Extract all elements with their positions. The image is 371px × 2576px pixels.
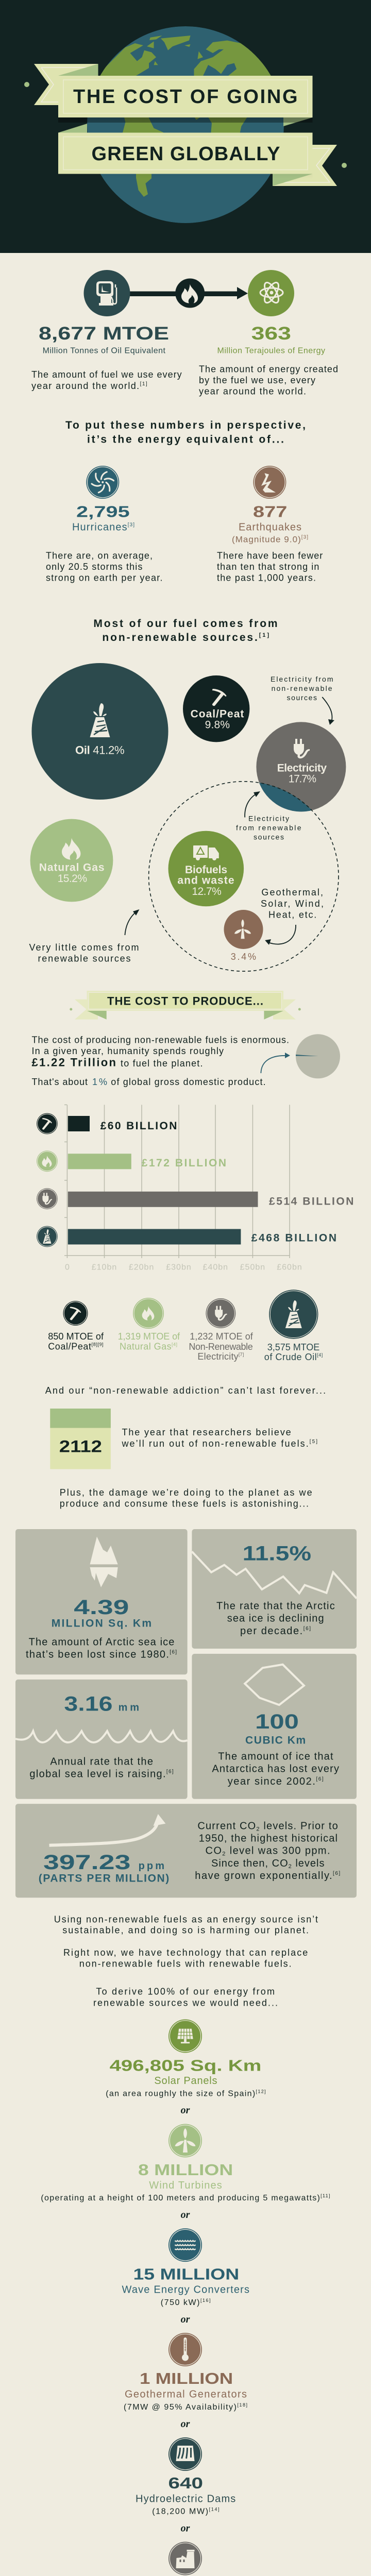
bubble: natural gas: 15.2% xyxy=(58,873,87,885)
crude oil xyxy=(264,1290,323,1362)
stat: earthquakes: (Magnitude 9.0) xyxy=(232,534,301,544)
stat: 363 million terajoules: 363 xyxy=(251,324,291,344)
bubble: oil xyxy=(32,663,168,800)
option: wave energy converters: 15 MILLION xyxy=(133,2265,239,2283)
text: year researchers believe: we’ll run out of non-renewable fuels. xyxy=(122,1438,309,1449)
heading: perspective xyxy=(65,419,306,445)
stat: earthquakes: 877 xyxy=(253,503,287,521)
header: dark background with globe and title xyxy=(0,0,371,253)
natural gas: [4] xyxy=(172,1342,177,1347)
non-renewable electricity xyxy=(189,1298,254,1362)
option: solar panels: [12] xyxy=(256,2089,266,2094)
panel: arctic sea ice lost: 4.39 xyxy=(74,1596,129,1619)
stat: earthquakes: the past 1,000 years. xyxy=(217,573,316,583)
bubble: biofuels and waste xyxy=(168,831,244,906)
panel: arctic sea ice lost: The amount of Arctic sea ice xyxy=(29,1637,174,1648)
label: electricity from renewable sources: Electricity xyxy=(248,814,289,822)
panel: sea level: 3.16 xyxy=(64,1693,112,1716)
icon: waves xyxy=(15,1731,188,1742)
text block: cost of producing fuels: The cost of producing non-renewable fuels is enormous. xyxy=(32,1035,289,1045)
panel: arctic decline rate: per decade. xyxy=(240,1625,302,1637)
heading: fuel sources: [1] xyxy=(259,632,269,638)
ribbon tail right xyxy=(273,145,337,186)
option: wave energy converters: (750 kW) xyxy=(161,2298,199,2307)
title banner line 2 xyxy=(58,133,312,174)
bar: oil: £468 BILLION xyxy=(251,1232,336,1244)
bar: oil xyxy=(68,1229,336,1245)
ribbon tail left xyxy=(34,64,98,105)
stat: earthquakes xyxy=(217,466,323,583)
bar: natural gas xyxy=(68,1154,226,1169)
option: wave energy converters: [16] xyxy=(200,2298,211,2303)
option: geothermal generators: 1 MILLION xyxy=(140,2369,233,2387)
stat: hurricanes: only 20.5 storms this xyxy=(46,562,142,572)
axis labels: £50bn xyxy=(240,1263,265,1272)
stat: 8,677 MTOE: The amount of fuel we use every xyxy=(31,369,182,380)
bubble: biofuels and waste: Biofuels xyxy=(185,864,227,876)
stat: 363 million terajoules: The amount of energy created xyxy=(199,364,338,374)
icon: fuel pump xyxy=(83,270,130,316)
arrow: rising curve xyxy=(49,1814,165,1845)
option: geothermal generators: [18] xyxy=(237,2402,247,2408)
stat: earthquakes: There have been fewer xyxy=(217,550,323,561)
label: very little comes from renewable sources xyxy=(29,942,139,964)
panel: CO2 levels: Current CO xyxy=(197,1820,256,1832)
bar: natural gas: £172 BILLION xyxy=(142,1157,226,1169)
stat: 8,677 MTOE xyxy=(31,324,182,391)
bubble: coal/peat: 9.8% xyxy=(205,719,230,731)
bar: electricity: £514 BILLION xyxy=(269,1195,353,1208)
bubble: electricity: 17.7% xyxy=(289,773,316,785)
stat: 8,677 MTOE: year around the world. xyxy=(31,381,139,391)
text: to derive 100%: To derive 100% of our energy from xyxy=(96,1987,275,1997)
crude oil: 3,575 MTOE xyxy=(267,1342,319,1352)
option: wave energy converters xyxy=(122,2228,249,2307)
option: geothermal generators: (7MW @ 95% Availability) xyxy=(124,2403,237,2412)
icon: flame xyxy=(175,278,205,308)
option: solar panels: 496,805 Sq. Km xyxy=(110,2056,261,2074)
panel: arctic sea ice lost: [6] xyxy=(170,1649,177,1655)
bubble: natural gas xyxy=(30,819,113,902)
bar: electricity xyxy=(68,1192,353,1208)
text block: cost of producing fuels: £1.22 Trillion xyxy=(32,1056,116,1069)
stat: 363 million terajoules: year around the world. xyxy=(199,386,306,397)
globe illustration xyxy=(87,26,289,223)
option: hydroelectric dams: Hydroelectric Dams xyxy=(136,2493,235,2504)
crude oil: [4] xyxy=(317,1352,323,1358)
panel: CO2 levels: CO xyxy=(205,1845,222,1857)
text: year researchers believe: The year that researchers believe xyxy=(122,1427,291,1437)
ribbon connector folds xyxy=(58,117,312,133)
heading: fuel sources: non-renewable sources. xyxy=(102,632,258,643)
bar: coal: £60 BILLION xyxy=(100,1120,177,1132)
panel: sea level: [6] xyxy=(166,1769,174,1775)
option: geothermal generators: Geothermal Generators xyxy=(125,2388,247,2400)
text block: cost of producing fuels xyxy=(32,1035,289,1087)
panel: antarctic ice loss: 100 xyxy=(255,1710,299,1733)
coal/peat: [8][9] xyxy=(92,1342,104,1347)
label: electricity from non-renewable sources xyxy=(271,675,333,702)
text: technology available: non-renewable fuels with renewable fuels. xyxy=(79,1958,292,1969)
option: hydroelectric dams: (18,200 MW) xyxy=(152,2507,208,2516)
panel: CO2 levels: 1950, the highest historical xyxy=(199,1833,338,1844)
label: electricity from non-renewable sources: sources xyxy=(286,693,317,702)
option: wave energy converters: Wave Energy Converters xyxy=(122,2284,249,2296)
panel: antarctic ice loss xyxy=(192,1654,357,1799)
panel: antarctic ice loss: [6] xyxy=(316,1776,324,1782)
title banner line 1 xyxy=(58,76,312,117)
label: electricity from renewable sources: sources xyxy=(254,833,284,841)
natural gas: Natural Gas xyxy=(120,1341,172,1351)
stat: hurricanes: [3] xyxy=(128,522,134,528)
arrow: to renewable circle xyxy=(125,909,139,935)
non-renewable electricity: Electricity xyxy=(197,1351,239,1362)
word: or: or xyxy=(181,2105,190,2116)
stat: 8,677 MTOE: [1] xyxy=(140,381,147,387)
text: damage to the planet xyxy=(60,1487,312,1509)
axis labels: £40bn xyxy=(203,1263,228,1272)
panel: sea level xyxy=(15,1680,188,1799)
banner shadows xyxy=(58,117,312,179)
title banner line 1: THE COST OF GOING xyxy=(73,86,298,108)
text: not sustainable: Using non-renewable fuels as an energy source isn’t xyxy=(54,1914,318,1924)
stat: hurricanes: strong on earth per year. xyxy=(46,573,163,583)
bubble: geothermal, solar, wind, heat: 3.4% xyxy=(231,952,256,962)
decorative dots xyxy=(24,82,29,87)
coal/peat: 850 MTOE of xyxy=(48,1331,104,1342)
axis labels: 0 xyxy=(65,1263,70,1272)
text: damage to the planet: Plus, the damage we’re doing to the planet as we xyxy=(60,1487,312,1498)
panel: CO2 levels: level was 300 ppm. xyxy=(226,1845,330,1857)
panel: antarctic ice loss: year since 2002. xyxy=(228,1776,315,1787)
text block: cost of producing fuels: to fuel the planet. xyxy=(121,1058,203,1069)
panel: CO2 levels: 2 xyxy=(222,1851,225,1857)
axis labels xyxy=(65,1263,302,1272)
icon: iceberg xyxy=(90,1536,118,1587)
option: wind turbines: [11] xyxy=(321,2193,330,2198)
section banner: the cost to produce: THE COST TO PRODUCE... xyxy=(107,994,263,1007)
word: or: or xyxy=(181,2314,190,2325)
option: wind turbines: (operating at a height of 100 meters and producing 5 megawatts) xyxy=(41,2194,320,2202)
non-renewable electricity: Non-Renewable xyxy=(189,1342,253,1352)
calendar: 2112: 2112 xyxy=(59,1437,102,1455)
bar: coal xyxy=(68,1116,177,1132)
axis labels: £30bn xyxy=(166,1263,192,1272)
panel: CO2 levels: Since then, CO xyxy=(211,1858,288,1869)
stat: 363 million terajoules: Million Terajoules of Energy xyxy=(217,347,325,355)
heading: fuel sources xyxy=(93,618,278,643)
panel: CO2 levels: levels. Prior to xyxy=(260,1820,338,1832)
stat: hurricanes: There are, on average, xyxy=(46,550,153,561)
stat: 8,677 MTOE: 8,677 MTOE xyxy=(39,324,169,344)
icon: coal xyxy=(37,1113,58,1134)
word: or: or xyxy=(181,2523,190,2534)
icon: oil xyxy=(37,1226,58,1247)
panel: CO2 levels: [6] xyxy=(333,1871,340,1876)
panel: arctic sea ice lost: MILLION Sq. Km xyxy=(52,1617,151,1629)
heading: perspective: it’s the energy equivalent of... xyxy=(87,434,284,445)
stat: earthquakes: Earthquakes xyxy=(239,521,301,533)
text block: cost of producing fuels: of global gross domestic product. xyxy=(111,1077,266,1087)
stat: 8,677 MTOE: Million Tonnes of Oil Equivalent xyxy=(43,347,166,355)
icon: electricity xyxy=(37,1188,58,1209)
option: hydroelectric dams xyxy=(136,2437,235,2516)
panel: CO2 levels: 2 xyxy=(289,1863,292,1870)
bubble: coal/peat: Coal/Peat xyxy=(191,708,244,720)
icon: earthquake xyxy=(253,466,286,499)
panel: CO2 levels: levels xyxy=(292,1858,325,1869)
natural gas: 1,319 MTOE of xyxy=(118,1331,180,1342)
option: solar panels: (an area roughly the size of Spain) xyxy=(106,2089,255,2098)
panel: CO2 levels: ppm xyxy=(139,1860,164,1872)
word: or: or xyxy=(181,2209,190,2221)
option: solar panels: Solar Panels xyxy=(154,2075,217,2087)
bar chart: cost to produce xyxy=(37,1105,353,1272)
panel: CO2 levels: 397.23 xyxy=(43,1851,130,1874)
stat: 363 million terajoules xyxy=(199,324,338,397)
arrow: to electricity xyxy=(322,697,334,725)
panel: arctic decline rate: The rate that the Arctic xyxy=(216,1601,335,1612)
panel: sea level: mm xyxy=(119,1702,139,1714)
stat: hurricanes xyxy=(46,466,163,583)
label: electricity from non-renewable sources: Electricity from xyxy=(271,675,333,683)
pie chart: 1% of GDP xyxy=(261,1034,340,1078)
text: non-renewable addiction: And our “non-renewable addiction” can’t last forever... xyxy=(45,1385,326,1396)
bubble chart: fuel sources xyxy=(29,663,346,971)
axis labels: £10bn xyxy=(92,1263,117,1272)
panel: CO2 levels: (PARTS PER MILLION) xyxy=(39,1872,169,1884)
label: very little comes from renewable sources: Very little comes from xyxy=(29,942,139,953)
text: year researchers believe xyxy=(122,1427,317,1449)
title banner line 2: GREEN GLOBALLY xyxy=(92,143,280,165)
coal/peat: Coal/Peat xyxy=(48,1341,91,1351)
stat: hurricanes: 2,795 xyxy=(76,503,130,521)
option: wind turbines xyxy=(41,2124,330,2202)
arrow: to geothermal bubble xyxy=(265,925,296,945)
section banner: the cost to produce xyxy=(70,991,301,1020)
text block: cost of producing fuels: 1% xyxy=(92,1077,107,1087)
stat: 363 million terajoules: by the fuel we use, every xyxy=(199,375,315,385)
connector arrow xyxy=(129,287,248,299)
arrow: to renewable electricity xyxy=(245,791,260,817)
icon row: consumption by fuel xyxy=(48,1290,323,1362)
heading: fuel sources: Most of our fuel comes from xyxy=(93,618,278,630)
text block: cost of producing fuels: That's about xyxy=(32,1077,88,1087)
axis labels: £20bn xyxy=(129,1263,154,1272)
crude oil: of Crude Oil xyxy=(264,1352,317,1362)
calendar: 2112 xyxy=(50,1409,111,1469)
bubble: oil: Oil 41.2% xyxy=(75,744,125,757)
line chart: zigzag decline xyxy=(192,1552,357,1599)
panel: arctic sea ice lost: that’s been lost since 1980. xyxy=(26,1649,169,1660)
label: electricity from non-renewable sources: non-renewable xyxy=(272,684,332,692)
panel: arctic sea ice lost xyxy=(15,1529,188,1674)
label: very little comes from renewable sources: renewable sources xyxy=(38,954,131,964)
text block: cost of producing fuels: In a given year, humanity spends roughly xyxy=(32,1046,224,1056)
text: technology available: Right now, we have technology that can replace xyxy=(63,1947,308,1958)
text: to derive 100% xyxy=(93,1987,278,2008)
bubble: natural gas: Natural Gas xyxy=(39,862,104,874)
panel: antarctic ice loss: Antarctica has lost every xyxy=(212,1764,339,1775)
panel: arctic decline rate: 11.5% xyxy=(243,1543,311,1565)
text: to derive 100%: renewable sources we would need... xyxy=(93,1998,278,2008)
natural gas xyxy=(118,1298,180,1351)
panel: arctic decline rate xyxy=(192,1529,357,1649)
stat: earthquakes: [3] xyxy=(301,534,308,540)
option: wind turbines: 8 MILLION xyxy=(138,2161,233,2179)
label: geothermal, solar, wind, heat, etc.: Geothermal, xyxy=(261,887,323,897)
icon: gas xyxy=(37,1150,58,1172)
panel: CO2 levels: have grown exponentially. xyxy=(195,1870,332,1882)
icon: ice cube outline xyxy=(245,1665,304,1705)
diagram: fuel to fire to energy xyxy=(83,270,294,316)
option: geothermal generators xyxy=(124,2333,247,2412)
bubble: biofuels and waste: 12.7% xyxy=(192,886,222,897)
bubble: coal/peat xyxy=(183,675,249,742)
option: wind turbines: Wind Turbines xyxy=(149,2180,222,2191)
bubble: electricity: Electricity xyxy=(277,762,327,774)
panel: arctic decline rate: sea ice is declining xyxy=(227,1613,324,1624)
stat: earthquakes: than ten that strong in xyxy=(217,562,319,572)
label: geothermal, solar, wind, heat, etc. xyxy=(261,887,324,920)
icon: recycling truck xyxy=(193,845,219,860)
label: electricity from renewable sources: from renewable xyxy=(236,823,301,832)
word: or: or xyxy=(181,2418,190,2430)
text: technology available xyxy=(63,1947,308,1969)
panel: sea level: global sea level is raising. xyxy=(29,1769,166,1780)
heading: perspective: To put these numbers in perspective, xyxy=(65,419,306,431)
panel: arctic decline rate: [6] xyxy=(303,1626,311,1632)
bubble: geothermal, solar, wind, heat xyxy=(224,910,263,962)
option: hydroelectric dams: 640 xyxy=(168,2474,203,2492)
panel: CO2 levels xyxy=(15,1804,357,1897)
panel: antarctic ice loss: CUBIC Km xyxy=(245,1735,306,1747)
text: damage to the planet: produce and consume these fuels is astonishing... xyxy=(60,1499,309,1509)
panel: CO2 levels: 2 xyxy=(256,1826,260,1832)
renewable sources dashed circle xyxy=(149,782,339,971)
non-renewable electricity: [7] xyxy=(239,1352,244,1357)
bubble: biofuels and waste: and waste xyxy=(177,875,234,886)
coal/peat xyxy=(48,1301,104,1351)
arrow xyxy=(261,1053,290,1073)
text: year researchers believe: [5] xyxy=(310,1439,317,1445)
non-renewable electricity: 1,232 MTOE of xyxy=(190,1331,254,1342)
icon: atom xyxy=(248,270,294,316)
label: geothermal, solar, wind, heat, etc.: Heat, etc. xyxy=(268,909,316,920)
text: not sustainable xyxy=(54,1914,318,1936)
icon: hurricane xyxy=(86,466,119,499)
label: geothermal, solar, wind, heat, etc.: Solar, Wind, xyxy=(261,899,324,909)
panel: antarctic ice loss: The amount of ice that xyxy=(218,1751,333,1762)
text: not sustainable: sustainable, and doing so is harming our planet. xyxy=(62,1925,309,1936)
option: hydroelectric dams: [14] xyxy=(209,2507,220,2512)
stat: hurricanes: Hurricanes xyxy=(72,521,127,533)
option: solar panels xyxy=(106,2020,266,2098)
label: electricity from renewable sources xyxy=(236,814,301,841)
option: a mix of technologies xyxy=(113,2542,258,2576)
bubble: electricity xyxy=(256,722,346,811)
axis labels: £60bn xyxy=(277,1263,302,1272)
panel: sea level: Annual rate that the xyxy=(50,1756,153,1768)
